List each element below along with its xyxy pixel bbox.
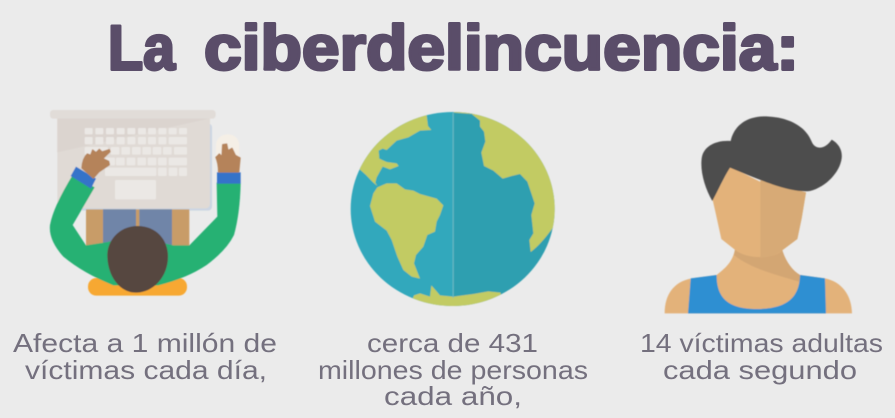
caption: center: millones de personas: [318, 355, 588, 385]
hands: [82, 144, 240, 178]
icon: globe: [347, 107, 560, 313]
ocean right: [453, 107, 559, 313]
icon: adult person: [665, 116, 852, 313]
caption: right: cada segundo: [663, 355, 857, 385]
caption: right: 14 víctimas adultas: [640, 328, 883, 358]
title: La: [108, 14, 176, 84]
face shadow: [760, 180, 806, 258]
caption: right: [640, 328, 883, 385]
cuffs: [71, 167, 241, 189]
head: [107, 226, 168, 293]
laptop: [50, 110, 216, 211]
continents: [357, 107, 560, 313]
meridian line: [453, 112, 454, 298]
chair: [88, 278, 187, 296]
green sweater and arms: [50, 175, 241, 285]
legs: [86, 209, 189, 248]
blue top: [688, 275, 826, 313]
caption: center: cada año,: [384, 381, 522, 411]
caption: left: [13, 328, 277, 385]
hair: [701, 116, 842, 201]
caption: left: víctimas cada día,: [25, 355, 267, 385]
caption: center: [318, 328, 588, 411]
neck shadow: [734, 249, 800, 282]
mouse: [216, 134, 239, 166]
face: [713, 167, 806, 257]
caption: left: Afecta a 1 millón de: [13, 328, 277, 358]
ocean left: [347, 107, 453, 313]
shoulders and neck: [665, 248, 852, 313]
icon: person at laptop: [50, 110, 241, 296]
title: ciberdelincuencia:: [204, 14, 799, 84]
caption: center: cerca de 431: [367, 328, 538, 358]
